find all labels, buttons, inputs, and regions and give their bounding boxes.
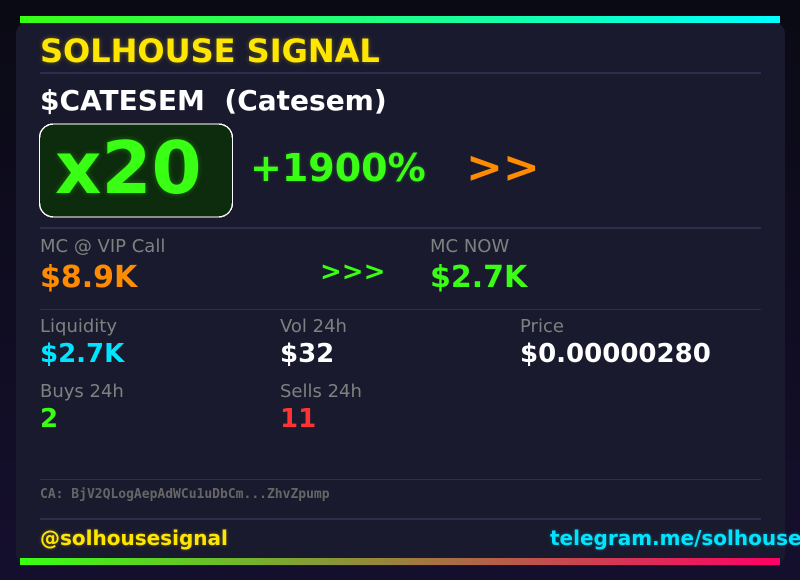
MC now [430, 236, 528, 295]
bottom gradient bar [20, 558, 780, 565]
stat: buys [40, 381, 124, 434]
green arrows: >>> [320, 257, 385, 287]
value: $2.7K [430, 260, 527, 295]
telegram link: telegram.me/solhouse [550, 526, 800, 550]
MC at call [40, 236, 165, 295]
token name: $CATESEM (Catesem) [40, 84, 387, 117]
stat: price: Price [520, 316, 564, 337]
label: MC @ VIP Call [40, 236, 165, 257]
stat: volume: $32 [280, 339, 334, 369]
stat: volume: Vol 24h [280, 316, 347, 337]
badge frame [39, 124, 233, 218]
handle: @solhousesignal [40, 526, 228, 550]
stat: sells: 11 [280, 404, 316, 434]
stat: liquidity [40, 316, 125, 369]
orange arrows: >> [466, 142, 540, 193]
top gradient bar [20, 16, 780, 23]
stat: liquidity: $2.7K [40, 339, 124, 369]
stat: price [520, 316, 711, 369]
stat: volume [280, 316, 347, 369]
title: SOLHOUSE SIGNAL [40, 32, 380, 70]
stat: sells [280, 381, 362, 434]
stat: price: $0.00000280 [520, 339, 711, 369]
stat: sells: Sells 24h [280, 381, 362, 402]
multiplier text: x20 [55, 126, 202, 210]
contract address: CA: BjV2QLogAepAdWCu1uDbCm...ZhvZpump [40, 487, 330, 502]
value: $8.9K [40, 260, 137, 295]
stat: buys: 2 [40, 404, 58, 434]
multiplier badge [39, 124, 233, 218]
stat: buys: Buys 24h [40, 381, 124, 402]
stat: liquidity: Liquidity [40, 316, 117, 337]
percent gain: +1900% [250, 146, 426, 190]
label: MC NOW [430, 236, 509, 257]
